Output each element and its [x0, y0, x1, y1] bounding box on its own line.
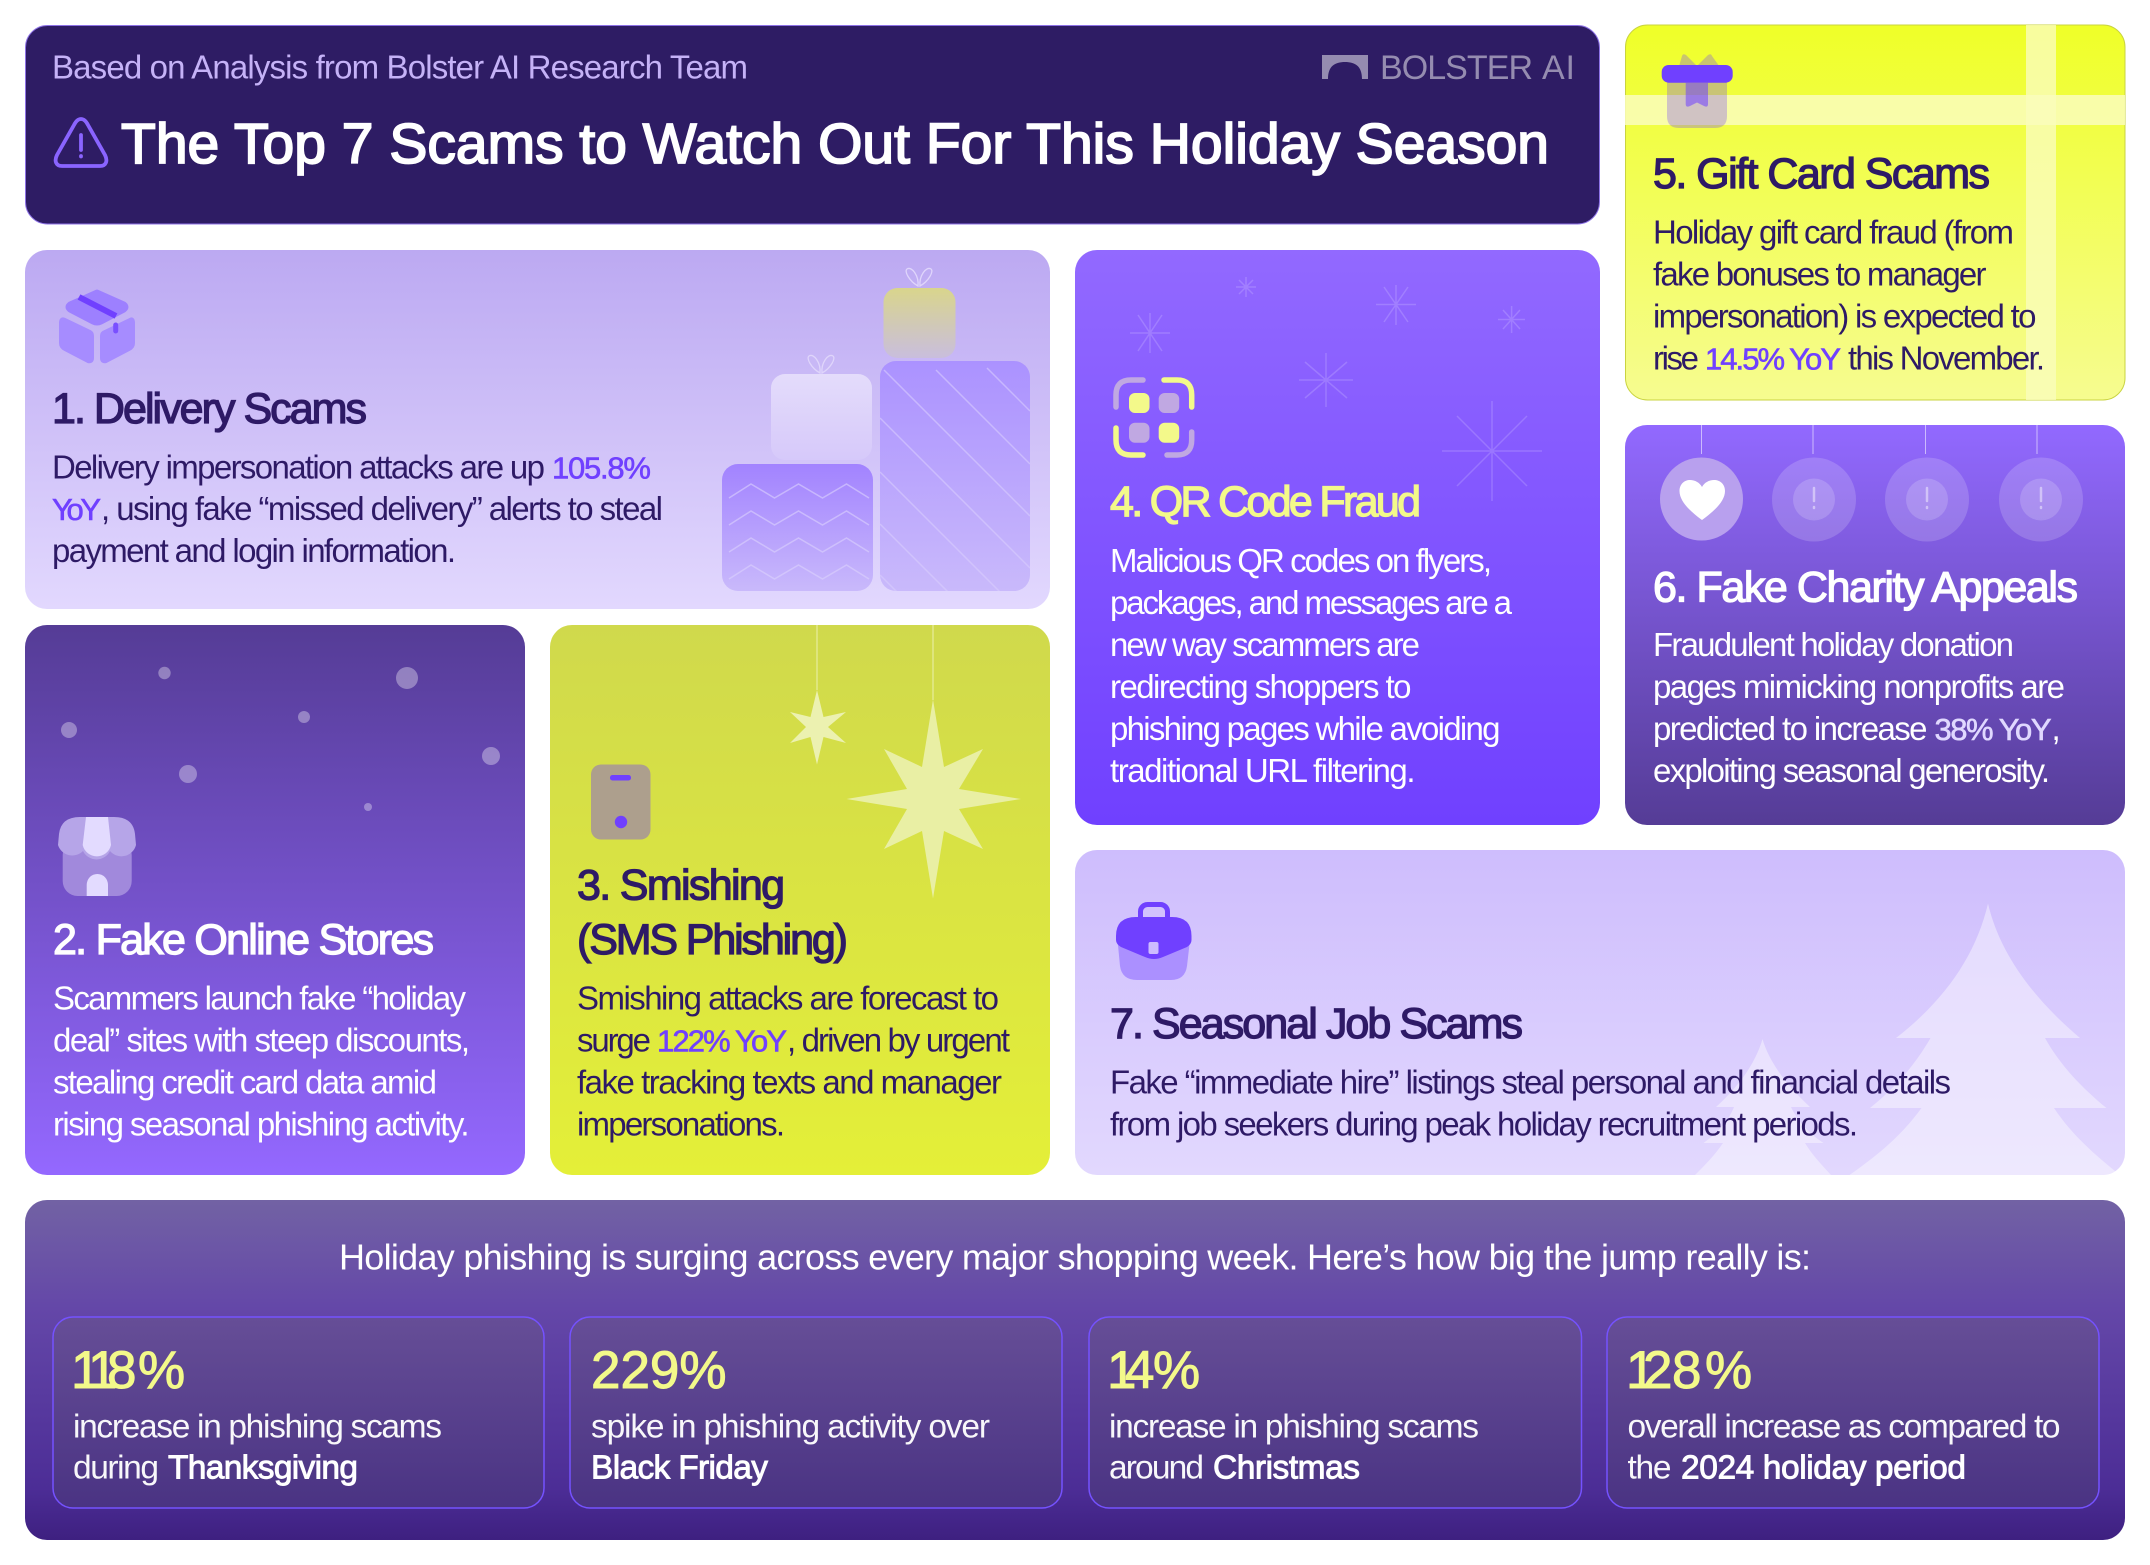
- heading: [577, 862, 848, 964]
- stat description: during: [73, 1450, 159, 1486]
- stat description: [73, 1408, 442, 1486]
- stat description: Thanksgiving: [168, 1450, 358, 1486]
- stat description: increase in phishing scams: [73, 1408, 442, 1446]
- icon: gift box: [1662, 54, 1733, 128]
- body text: , driven by urgent: [787, 1022, 1010, 1058]
- heading: 4. QR Code Fraud: [1110, 478, 1421, 526]
- decoration: ornament strings: [1702, 425, 2037, 454]
- heading: (SMS Phishing): [577, 916, 848, 964]
- icon: QR scan: [1116, 380, 1192, 455]
- body text: predicted to increase: [1653, 710, 1928, 747]
- stat description: overall increase as compared to: [1628, 1408, 2060, 1446]
- body text: ,: [2052, 710, 2061, 747]
- stat description: increase in phishing scams: [1109, 1408, 1479, 1446]
- body text: phishing pages while avoiding: [1110, 710, 1500, 747]
- body text: Fraudulent holiday donation: [1653, 626, 2014, 663]
- body text: rising seasonal phishing activity.: [53, 1106, 470, 1142]
- heading: 5. Gift Card Scams: [1653, 150, 1990, 198]
- body text: [1110, 542, 1513, 789]
- stat value: 118%: [71, 1341, 185, 1400]
- stat card: Christmas: [1089, 1317, 1582, 1508]
- stat description: [591, 1408, 990, 1486]
- body text: redirecting shoppers to: [1110, 668, 1412, 705]
- panel: 2 fake online stores: [25, 625, 525, 1175]
- body text: Delivery impersonation attacks are up: [52, 448, 545, 486]
- body text: stealing credit card data amid: [53, 1064, 437, 1100]
- stat description: [1109, 1408, 1479, 1486]
- Bolster AI wordmark: BOLSTER: [1380, 49, 1533, 87]
- body text: Smishing attacks are forecast to: [577, 980, 999, 1016]
- body text: Fake “immediate hire” listings steal personal and financial details: [1110, 1064, 1951, 1100]
- body text: Holiday gift card fraud (from: [1653, 214, 2014, 250]
- stat card: Black Friday: [570, 1317, 1062, 1508]
- body text: [1653, 214, 2045, 376]
- icon: briefcase: [1116, 904, 1192, 980]
- body text: surge: [577, 1022, 651, 1058]
- stat description: spike in phishing activity over: [591, 1408, 990, 1446]
- stat description: the: [1628, 1450, 1672, 1486]
- body text: impersonations.: [577, 1106, 785, 1142]
- header subtitle: Based on Analysis from Bolster AI Research Team: [52, 48, 748, 86]
- stats heading: Holiday phishing is surging across every major shopping week. Here’s how big the jump really is:: [339, 1236, 1811, 1278]
- body text: [1110, 1064, 1951, 1142]
- header banner: [26, 26, 1600, 224]
- stat card: Thanksgiving: [53, 1317, 544, 1508]
- icon: warning triangle: [56, 119, 106, 166]
- panel: 7 seasonal job scams: [1075, 850, 2125, 1175]
- icon: Bolster logo: [1322, 55, 1368, 79]
- body text: fake tracking texts and manager: [577, 1064, 1002, 1100]
- heading: 6. Fake Charity Appeals: [1653, 564, 2078, 612]
- panel: 6 fake charity appeals: [1625, 425, 2125, 825]
- stat card: 2024 holiday period: [1607, 1317, 2099, 1508]
- body text: traditional URL filtering.: [1110, 752, 1416, 789]
- body text: pages mimicking nonprofits are: [1653, 668, 2065, 705]
- body text: from job seekers during peak holiday recruitment periods.: [1110, 1106, 1858, 1142]
- body text: 105.8%: [552, 450, 651, 486]
- panel: 3 smishing: [550, 625, 1050, 1175]
- body text: [1653, 626, 2065, 789]
- stat value: 128%: [1626, 1341, 1752, 1400]
- panel: 5 gift card scams: [1625, 25, 2125, 400]
- decoration: gift ribbon: [1625, 25, 2125, 400]
- heading: 3. Smishing: [577, 862, 785, 910]
- body text: Malicious QR codes on flyers,: [1110, 542, 1492, 579]
- body text: rise: [1653, 340, 1699, 376]
- heading: 1. Delivery Scams: [52, 385, 367, 433]
- body text: 14.5% YoY: [1705, 342, 1841, 376]
- body text: deal” sites with steep discounts,: [53, 1022, 470, 1058]
- body text: 38% YoY: [1934, 712, 2052, 747]
- body text: impersonation) is expected to: [1653, 298, 2036, 334]
- body text: [53, 980, 470, 1142]
- stat description: [1628, 1408, 2060, 1486]
- body text: packages, and messages are a: [1110, 584, 1513, 621]
- ornament: warning 1: [1772, 458, 1856, 542]
- panel: 1 delivery scams: [25, 250, 1050, 609]
- panel: 4 QR code fraud: [1075, 250, 1600, 825]
- ornament: warning 2: [1885, 458, 1969, 542]
- icon: phone: [591, 764, 650, 840]
- body text: [52, 448, 663, 569]
- panel: holiday phishing stats: [25, 1200, 2125, 1540]
- icon: storefront: [58, 817, 136, 896]
- stat description: Christmas: [1213, 1450, 1360, 1486]
- Bolster AI wordmark: AI: [1542, 49, 1575, 87]
- body text: , using fake “missed delivery” alerts to steal: [101, 490, 663, 527]
- decoration: snow dots: [61, 667, 500, 811]
- ornament: heart: [1660, 458, 1743, 540]
- stat description: around: [1109, 1450, 1204, 1486]
- body text: exploiting seasonal generosity.: [1653, 752, 2050, 789]
- stat value: 14%: [1107, 1341, 1200, 1400]
- stat value: 229%: [591, 1341, 726, 1400]
- icon: parcel box: [61, 292, 133, 361]
- body text: payment and login information.: [52, 532, 456, 569]
- body text: fake bonuses to manager: [1653, 256, 1986, 292]
- heading: 7. Seasonal Job Scams: [1110, 1000, 1523, 1048]
- stat description: Black Friday: [591, 1450, 768, 1486]
- body text: [577, 980, 1010, 1142]
- decoration: snowflakes: [1130, 277, 1542, 501]
- body text: this November.: [1848, 340, 2045, 376]
- illustration: stacked gifts: [722, 268, 1030, 593]
- body text: new way scammers are: [1110, 626, 1420, 663]
- heading: 2. Fake Online Stores: [53, 916, 434, 964]
- body text: Scammers launch fake “holiday: [53, 980, 466, 1016]
- body text: 122% YoY: [657, 1024, 787, 1058]
- decoration: pine trees: [1695, 904, 2120, 1175]
- ornament: warning 3: [1999, 458, 2083, 542]
- body text: YoY: [52, 492, 101, 527]
- title: The Top 7 Scams to Watch Out For This Holiday Season: [121, 112, 1549, 176]
- stat description: 2024 holiday period: [1681, 1450, 1966, 1486]
- decoration: hanging stars: [790, 625, 1021, 898]
